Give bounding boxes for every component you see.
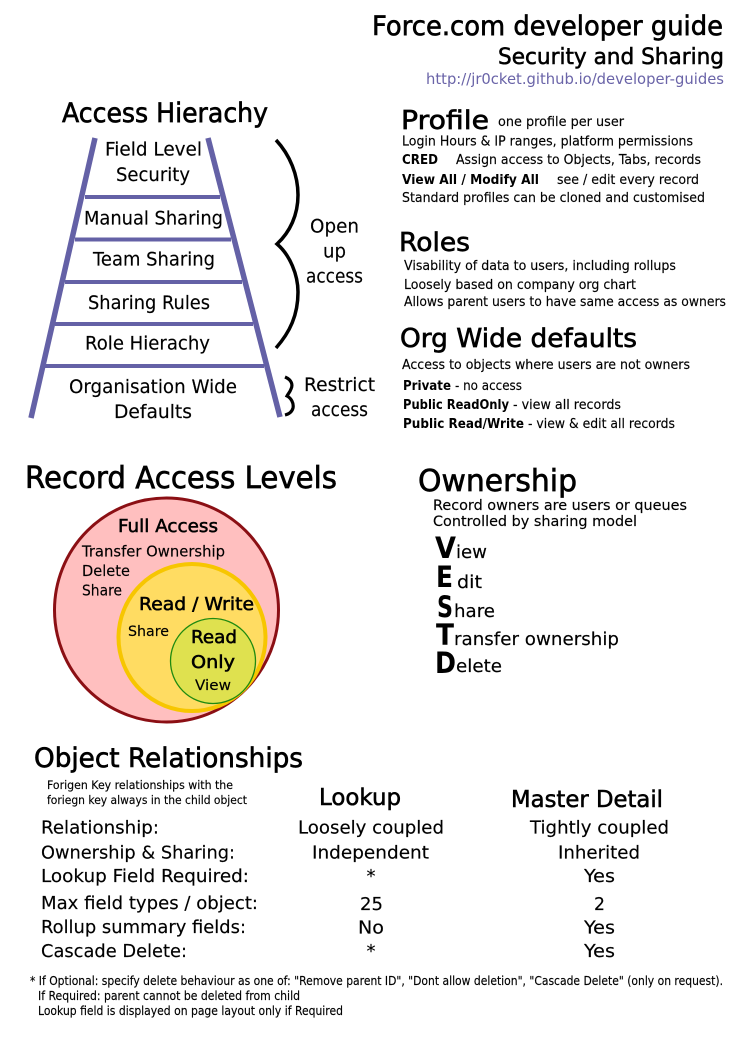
panel: ownership: dit <box>457 572 482 593</box>
panel: ownership: Record owners are users or queues <box>433 498 687 514</box>
table: relationship comparison: Lookup <box>319 785 401 811</box>
panel: ownership: ransfer ownership <box>454 629 619 650</box>
label: restrict access <box>304 374 375 421</box>
panel: org wide defaults: Access to objects where users are not owners <box>402 358 690 373</box>
panel: profile: Standard profiles can be cloned and customised <box>402 191 705 206</box>
panel: profile: see / edit every record <box>557 173 699 188</box>
heading: record access levels: Record Access Levels <box>25 461 337 496</box>
table: relationship comparison: Yes <box>583 918 615 938</box>
table: relationship comparison <box>41 785 669 962</box>
panel: org wide defaults: Public Read/Write <box>403 417 524 432</box>
venn diagram: record access levels: Transfer Ownership <box>81 542 225 560</box>
table: relationship comparison: * <box>366 866 376 887</box>
venn diagram: record access levels: Full Access <box>118 516 218 537</box>
table: relationship comparison: Master Detail <box>511 787 663 813</box>
panel: org wide defaults: Private <box>403 379 451 394</box>
table: relationship comparison: Relationship: <box>41 818 159 838</box>
venn diagram: record access levels: Read / Write <box>139 594 254 615</box>
panel: ownership: Ownership <box>418 464 577 499</box>
ladder diagram: Defaults <box>114 401 192 423</box>
panel: roles: Visability of data to users, including rollups <box>404 259 676 274</box>
panel: ownership: T <box>436 618 454 652</box>
table: relationship comparison: 25 <box>360 894 383 915</box>
label: open up access <box>306 216 363 288</box>
table: relationship comparison: Yes <box>583 941 615 962</box>
label: restrict access: Restrict <box>304 374 375 396</box>
ladder diagram: Role Hierachy <box>85 332 210 354</box>
label: open up access: access <box>306 266 363 288</box>
panel: ownership: V <box>435 531 457 565</box>
ladder diagram: Field Level <box>105 138 202 160</box>
brace: open up access <box>276 140 298 348</box>
venn diagram: record access levels: Only <box>191 652 235 673</box>
ladder diagram <box>31 138 280 423</box>
title block <box>372 11 724 88</box>
footnote <box>30 974 723 1018</box>
panel: profile: Assign access to Objects, Tabs, records <box>456 153 701 168</box>
table: relationship comparison: * <box>366 941 376 962</box>
venn diagram: record access levels <box>54 498 278 722</box>
table: relationship comparison: Ownership & Sharing: <box>41 842 235 864</box>
panel: profile: Profile <box>401 106 489 136</box>
table: relationship comparison: Rollup summary fields: <box>41 917 246 938</box>
venn diagram: record access levels: View <box>195 678 231 694</box>
footnote: If Required: parent cannot be deleted from child <box>38 989 300 1003</box>
panel: org wide defaults: - view all records <box>513 398 621 413</box>
note: foreign key: foriegn key always in the child object <box>47 793 247 807</box>
panel: ownership: elete <box>456 656 502 677</box>
ladder diagram: Manual Sharing <box>84 208 223 230</box>
panel: ownership <box>418 464 687 680</box>
table: relationship comparison: 2 <box>594 894 605 915</box>
panel: org wide defaults: - view & edit all records <box>528 417 675 432</box>
label: restrict access: access <box>311 399 368 421</box>
table: relationship comparison: Inherited <box>558 842 640 864</box>
panel: profile: Login Hours & IP ranges, platform permissions <box>402 134 693 150</box>
table: relationship comparison: Yes <box>583 866 615 887</box>
table: relationship comparison: Lookup Field Required: <box>41 866 249 887</box>
panel: roles: Allows parent users to have same access as owners <box>404 295 726 310</box>
table: relationship comparison: Loosely coupled <box>298 818 444 838</box>
venn diagram: record access levels: Share <box>128 624 169 640</box>
panel: ownership: S <box>437 590 453 624</box>
heading: object relationships: Object Relationships <box>34 743 303 774</box>
panel: profile: CRED <box>402 153 438 168</box>
panel: org wide defaults: - no access <box>455 379 522 394</box>
table: relationship comparison: Tightly coupled <box>529 818 669 838</box>
table: relationship comparison: Cascade Delete: <box>41 941 187 962</box>
ladder diagram: Sharing Rules <box>88 292 210 314</box>
brace: restrict access <box>285 377 293 415</box>
title block: Security and Sharing <box>498 45 724 70</box>
title block: Force.com developer guide <box>372 11 723 42</box>
panel: org wide defaults: Public ReadOnly <box>403 398 509 413</box>
note: foreign key <box>47 778 247 807</box>
label: open up access: up <box>323 240 346 262</box>
panel: roles: Roles <box>399 228 470 258</box>
title block: http://jr0cket.github.io/developer-guides <box>426 70 724 88</box>
ladder diagram: Organisation Wide <box>69 376 237 398</box>
panel: ownership: iew <box>456 542 487 563</box>
heading: access hierarchy: Access Hierachy <box>62 98 268 129</box>
panel: org wide defaults: Org Wide defaults <box>400 324 637 354</box>
table: relationship comparison: Max field types / object: <box>41 893 258 914</box>
panel: roles <box>399 228 726 310</box>
venn diagram: record access levels: Read <box>191 627 237 648</box>
panel: ownership: E <box>436 560 453 594</box>
footnote: Lookup field is displayed on page layout only if Required <box>38 1004 343 1018</box>
note: foreign key: Forigen Key relationships with the <box>47 778 233 792</box>
ladder diagram: Team Sharing <box>92 248 215 270</box>
panel: profile: one profile per user <box>498 115 625 130</box>
table: relationship comparison: No <box>358 918 384 938</box>
venn diagram: record access levels: Share <box>82 582 122 600</box>
ladder diagram: Security <box>116 164 190 186</box>
table: relationship comparison: Independent <box>312 842 429 864</box>
panel: ownership: Controlled by sharing model <box>433 514 637 530</box>
panel: ownership: hare <box>454 601 495 622</box>
panel: profile: View All / Modify All <box>402 173 539 188</box>
panel: profile <box>401 106 705 206</box>
panel: ownership: D <box>435 646 456 680</box>
panel: roles: Loosely based on company org chart <box>404 278 636 293</box>
label: open up access: Open <box>310 216 359 238</box>
panel: org wide defaults <box>400 324 690 432</box>
venn diagram: record access levels: Delete <box>82 562 130 580</box>
